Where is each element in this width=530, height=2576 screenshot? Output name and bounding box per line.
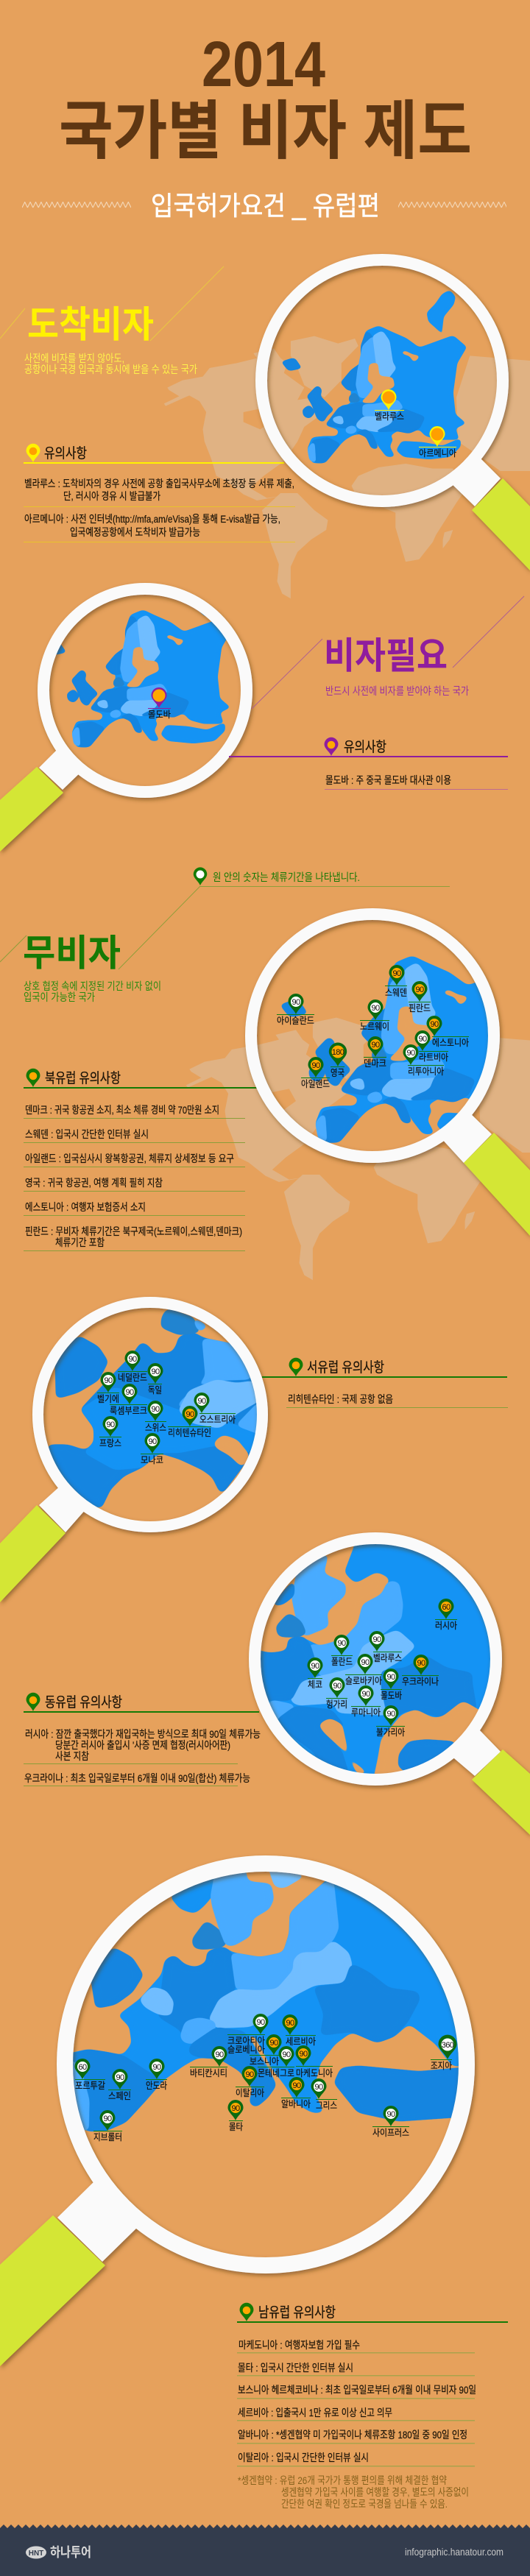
pin: Austria: 오스트리아 (199, 1415, 236, 1425)
notes: northern Europe: 북유럽 유의사항 (45, 1070, 121, 1086)
pin: Bulgaria: 90 (386, 1710, 395, 1719)
background world map: upper (164, 336, 530, 598)
notes: southern Europe: 세르비아 : 입출국시 1만 유로 이상 신고 의무 (238, 2407, 392, 2418)
pin: Norway (360, 999, 389, 1032)
magnifier: eastern Europe map (236, 1516, 530, 1835)
pin: Cyprus: 사이프러스 (372, 2128, 409, 2138)
pin: Luxembourg: 90 (125, 1388, 134, 1397)
notes: arrival visa: 벨라루스 : 도착비자의 경우 사전에 공항 출입국사무소에 초청장 등 서류 제출, (24, 478, 294, 489)
magnifier: visa required map (0, 575, 247, 852)
pin: Denmark (364, 1036, 386, 1069)
pin: Montenegro: 90 (282, 2050, 291, 2059)
pin: Norway: 90 (371, 1004, 380, 1013)
pin: Croatia and Slovenia (227, 2014, 268, 2055)
pin: Greece: 그리스 (316, 2101, 337, 2111)
pin: Vatican City (190, 2046, 227, 2078)
pin: Bulgaria: 불가리아 (376, 1727, 405, 1738)
footnote: Schengen agreement: 간단한 여권 확인 정도로 국경을 넘나들 수 있음. (281, 2498, 448, 2510)
panel: arrival visa (0, 266, 295, 542)
pin: Serbia (283, 2014, 316, 2047)
notes: northern Europe (24, 1069, 257, 1251)
pin: Montenegro (258, 2046, 294, 2078)
pin: Moldova (381, 1669, 402, 1701)
pin: Bosnia: 보스니아 (250, 2056, 279, 2067)
subtitle (22, 191, 506, 221)
pin: Albania (281, 2077, 311, 2109)
notes: northern Europe: 스웨덴 : 입국시 간단한 인터뷰 실시 (25, 1128, 149, 1140)
pin: Armenia (419, 426, 456, 459)
pin: Luxembourg: 룩셈부르크 (110, 1406, 147, 1416)
pin: Serbia: 세르비아 (286, 2037, 316, 2047)
title: 국가별 비자 제도 (59, 96, 472, 167)
notes: eastern Europe: 당분간 러시아 출입시 '사증 면제 협정(러시아어판) (55, 1739, 230, 1751)
pin: Gibraltar: 90 (103, 2115, 112, 2123)
pin: Sweden: 스웨덴 (385, 988, 407, 998)
magnifier: northern Europe map (251, 908, 530, 1236)
pin: Monaco (141, 1433, 163, 1465)
pin: Cyprus (372, 2106, 409, 2138)
pin: Iceland: 90 (292, 998, 300, 1007)
pin: Slovakia: 90 (361, 1658, 370, 1667)
notes: northern Europe: 체류기간 포함 (55, 1236, 105, 1248)
pin: Croatia and Slovenia: 슬로베니아 (227, 2045, 265, 2055)
magnifier: western Europe map (0, 1303, 264, 1602)
pin: Gibraltar (93, 2110, 122, 2142)
heading: visa free: 무비자 (23, 933, 121, 974)
pin: Belarus (375, 389, 404, 422)
footer URL: infographic.hanatour.com (405, 2546, 504, 2558)
notes: southern Europe: 이탈리아 : 입국시 간단한 인터뷰 실시 (238, 2452, 369, 2463)
pin: Liechtenstein: 리히텐슈타인 (168, 1428, 211, 1438)
pin: Armenia: 아르메니아 (419, 448, 456, 459)
notes: northern Europe: 아일랜드 : 입국심사시 왕복항공권, 체류지 상세정보 등 요구 (25, 1153, 234, 1164)
notes: northern Europe: 덴마크 : 귀국 항공권 소지, 최소 체류 경비 약 70만원 소지 (25, 1104, 219, 1116)
pin: United Kingdom (329, 1043, 347, 1078)
pin: United Kingdom: 180 (332, 1048, 344, 1057)
pin: Italy: 이탈리아 (236, 2088, 264, 2098)
description: visa free: 상호 협정 속에 지정된 기간 비자 없이 (24, 980, 161, 993)
pin: Georgia: 조지아 (431, 2061, 452, 2071)
pin: Czech Republic (308, 1657, 322, 1690)
pin: Liechtenstein: 90 (186, 1410, 194, 1419)
pin: Austria: 90 (197, 1397, 206, 1406)
pin: Romania: 루마니아 (351, 1708, 381, 1718)
pin: Vatican City: 90 (215, 2050, 224, 2059)
pin: Moldova: 90 (386, 1673, 395, 1682)
pin: Ireland: 아일랜드 (301, 1079, 330, 1089)
notes: western Europe: 서유럽 유의사항 (307, 1359, 384, 1376)
notes: arrival visa: 입국예정공항에서 도착비자 발급가능 (70, 526, 200, 538)
pin: Russia: 60 (442, 1603, 451, 1612)
pin: Bosnia: 90 (269, 2039, 278, 2048)
pin: Hungary (326, 1677, 347, 1710)
pin: Czech Republic: 90 (311, 1662, 319, 1671)
pin: Luxembourg (110, 1384, 147, 1416)
pin: Bosnia (250, 2034, 281, 2067)
pin: Greece (311, 2078, 337, 2111)
pin: Russia (435, 1599, 457, 1631)
pin: France: 프랑스 (99, 1438, 121, 1448)
footnote: Schengen agreement: 셍겐협약 가입국 사이를 여행할 경우, 별도의 사증없이 (281, 2486, 469, 2498)
heading: visa required: 비자필요 (324, 635, 448, 676)
logo: HNT: 하나투어 (50, 2545, 91, 2560)
pin: North Macedonia: 마케도니아 (296, 2068, 333, 2078)
pin: Andorra (146, 2059, 167, 2091)
pin: North Macedonia: 90 (299, 2050, 308, 2059)
notes: eastern Europe: 러시아 : 잠깐 출국했다가 재입국하는 방식으로 최대 90일 체류가능 (25, 1728, 261, 1740)
pin: Germany: 독일 (148, 1385, 162, 1395)
pin: Italy: 90 (245, 2070, 254, 2079)
notes: southern Europe: 알바니아 : *셍겐협약 미 가입국이나 체류조항 180일 중 90일 인정 (238, 2429, 467, 2441)
notes: western Europe (262, 1358, 508, 1408)
pin: United Kingdom: 영국 (331, 1068, 344, 1078)
pin: Malta: 몰타 (229, 2122, 243, 2132)
pin: Italy (236, 2066, 264, 2098)
pin: Slovakia: 슬로바키아 (345, 1676, 382, 1686)
pin: Belgium (97, 1372, 119, 1404)
panel: visa required (229, 596, 524, 790)
notes: northern Europe: 핀란드 : 무비자 체류기간은 북구제국(노르웨이,스웨덴,덴마크) (25, 1225, 242, 1237)
footnote: Schengen agreement: *셍겐협약 : 유럽 26개 국가가 통행 편의를 위해 체결한 협약 (238, 2474, 447, 2486)
pin: France (99, 1416, 121, 1448)
pin: Germany: 90 (151, 1367, 160, 1376)
pin: Portugal: 포르투갈 (75, 2081, 105, 2091)
pin: Spain (108, 2069, 131, 2101)
notes: southern Europe (237, 2303, 508, 2510)
description: visa required: 반드시 사전에 비자를 받아야 하는 국가 (325, 685, 469, 698)
pin: Latvia: 90 (418, 1035, 427, 1044)
pin: Switzerland: 스위스 (145, 1423, 166, 1433)
pin: Moldova: 몰도바 (381, 1691, 402, 1701)
pin: Germany (147, 1363, 163, 1395)
notes: arrival visa: 아르메니아 : 사전 인터넷(http://mfa,am/eVisa)을 통해 E-visa발급 가능, (24, 513, 280, 525)
pin: Portugal: 60 (78, 2063, 87, 2072)
pin: Moldova (148, 687, 171, 720)
pin: Sweden: 90 (392, 969, 401, 978)
pin: Bulgaria (376, 1705, 405, 1738)
pin: Albania: 알바니아 (281, 2099, 311, 2109)
notes: eastern Europe: 동유럽 유의사항 (45, 1694, 122, 1710)
description: visa free (24, 980, 161, 1004)
pin: Belgium: 90 (104, 1376, 113, 1385)
pin: Sweden (385, 965, 407, 998)
notes: southern Europe: 보스니아 헤르체코비나 : 최초 입국일로부터 6개월 이내 무비자 90일 (238, 2384, 476, 2396)
magnifier: arrival visa map (261, 260, 530, 570)
pin: Ukraine (402, 1655, 439, 1687)
pin: Poland: 폴란드 (331, 1657, 353, 1667)
logo: HNT (26, 2545, 91, 2560)
pin: Georgia: 360 (442, 2041, 454, 2050)
pin: Cyprus: 90 (386, 2110, 395, 2119)
notes: arrival visa: 유의사항 (44, 445, 87, 461)
notes: visa required (229, 737, 508, 790)
pin: Spain: 스페인 (108, 2091, 131, 2101)
notes: eastern Europe (24, 1693, 261, 1786)
notes: southern Europe: 몰타 : 입국시 간단한 인터뷰 실시 (238, 2362, 353, 2374)
pin: Ukraine: 우크라이나 (402, 1677, 439, 1687)
pin: Albania: 90 (292, 2081, 301, 2090)
notes: visa required: 몰도바 : 주 중국 몰도바 대사관 이용 (325, 774, 451, 786)
notes: arrival visa: 단, 러시아 경유 시 발급불가 (63, 490, 160, 502)
pin: Lithuania (403, 1044, 444, 1077)
pin: Latvia (415, 1030, 448, 1063)
panel: visa free (0, 867, 450, 1251)
description: arrival visa: 사전에 비자를 받지 않아도, (24, 353, 124, 365)
magnifier: southern Europe map (0, 1864, 487, 2366)
pin: North Macedonia (296, 2045, 333, 2078)
description: arrival visa (24, 353, 197, 376)
pin: Greece: 90 (314, 2083, 323, 2092)
pin: Croatia and Slovenia: 크로아티아 (227, 2036, 265, 2046)
pin: Russia: 러시아 (435, 1621, 457, 1631)
pin: Ireland (301, 1057, 330, 1089)
pin: Moldova: 몰도바 (148, 710, 171, 720)
pin: Netherlands: 90 (128, 1355, 137, 1364)
notes: eastern Europe: 사본 지참 (55, 1750, 89, 1762)
pin: Andorra: 90 (152, 2063, 161, 2072)
pin: Poland (331, 1635, 353, 1667)
pin: Malta: 90 (231, 2104, 240, 2113)
subtitle: 입국허가요건 _ 유럽편 (151, 191, 380, 221)
pin: Lithuania: 90 (406, 1049, 415, 1058)
pin: Norway: 노르웨이 (360, 1022, 389, 1032)
footnote: Schengen agreement (238, 2474, 469, 2510)
legend note: number in circle (194, 867, 360, 885)
heading: arrival visa: 도착비자 (27, 304, 154, 345)
pin: Poland: 90 (337, 1639, 346, 1648)
pin: Finland (409, 981, 431, 1013)
pin: Monaco: 90 (148, 1437, 157, 1446)
pin: Gibraltar: 지브롤터 (93, 2132, 122, 2142)
pin: Switzerland (145, 1401, 166, 1433)
pin: Liechtenstein (168, 1406, 211, 1438)
logo: HNT: HNT (29, 2550, 43, 2558)
pin: Estonia: 에스토니아 (432, 1038, 469, 1048)
pin: Estonia (427, 1016, 469, 1048)
pin: Netherlands: 네덜란드 (118, 1373, 147, 1383)
pin: Austria (194, 1393, 236, 1425)
pin: Denmark: 90 (371, 1041, 380, 1050)
notes: eastern Europe: 우크라이나 : 최초 입국일로부터 6개월 이내 90일(합산) 체류가능 (24, 1772, 250, 1784)
pin: Belgium: 벨기에 (97, 1394, 119, 1404)
pin: Iceland: 아이슬란드 (277, 1016, 314, 1026)
pin: Denmark: 덴마크 (364, 1058, 386, 1069)
pin: Romania: 90 (361, 1690, 370, 1699)
pin: Spain: 90 (116, 2073, 124, 2082)
notes: western Europe: 리히텐슈타인 : 국제 공항 없음 (288, 1393, 393, 1405)
pin: Serbia: 90 (286, 2019, 294, 2028)
pin: Hungary: 헝가리 (326, 1699, 347, 1710)
notes: northern Europe: 영국 : 귀국 항공권, 여행 계획 필히 지참 (25, 1177, 163, 1189)
notes: southern Europe: 남유럽 유의사항 (258, 2304, 336, 2321)
pin: Belarus: 벨라루스 (375, 411, 404, 422)
pin: Czech Republic: 체코 (308, 1680, 322, 1690)
notes: arrival visa (24, 444, 295, 542)
notes: northern Europe: 에스토니아 : 여행자 보험증서 소지 (25, 1201, 146, 1213)
pin: Belarus: 벨라루스 (373, 1653, 402, 1663)
pin: Monaco: 모나코 (141, 1455, 163, 1465)
pin: Latvia: 라트비아 (419, 1052, 448, 1063)
pin: Portugal (75, 2059, 105, 2091)
pin: Belarus (370, 1631, 402, 1663)
pin: Ireland: 90 (311, 1061, 320, 1070)
title: 2014 (202, 29, 325, 100)
legend note: number in circle: 원 안의 숫자는 체류기간을 나타냅니다. (213, 871, 360, 884)
notes: southern Europe: 마케도니아 : 여행자보험 가입 필수 (239, 2339, 360, 2351)
pin: Finland: 핀란드 (409, 1003, 431, 1013)
description: visa free: 입국이 가능한 국가 (24, 991, 95, 1004)
notes: visa required: 유의사항 (344, 739, 386, 755)
pin: Romania (351, 1685, 381, 1718)
pin: Andorra: 안도라 (146, 2081, 167, 2091)
background world map: lower (186, 1018, 530, 1280)
title (59, 29, 472, 167)
pin: Estonia: 90 (430, 1020, 439, 1029)
pin: Hungary: 90 (333, 1682, 342, 1691)
pin: Iceland (277, 994, 314, 1026)
pin: Montenegro: 몬테네그로 (258, 2068, 294, 2078)
pin: Slovakia (345, 1654, 382, 1686)
pin: Vatican City: 바티칸시티 (190, 2068, 227, 2078)
pin: Belarus: 90 (372, 1635, 381, 1644)
footer (0, 2524, 530, 2576)
pin: Malta (228, 2100, 243, 2132)
pin: Netherlands (118, 1351, 147, 1383)
pin: France: 90 (106, 1420, 115, 1429)
pin: Switzerland: 90 (151, 1405, 160, 1414)
pin: Ukraine: 90 (417, 1659, 425, 1668)
description: arrival visa: 공항이나 국경 입국과 동시에 받을 수 있는 국가 (24, 364, 197, 376)
pin: Croatia and Slovenia: 90 (256, 2018, 265, 2027)
pin: Lithuania: 리투아니아 (408, 1066, 444, 1077)
pin: Georgia (431, 2035, 456, 2071)
pin: Finland: 90 (415, 986, 424, 994)
